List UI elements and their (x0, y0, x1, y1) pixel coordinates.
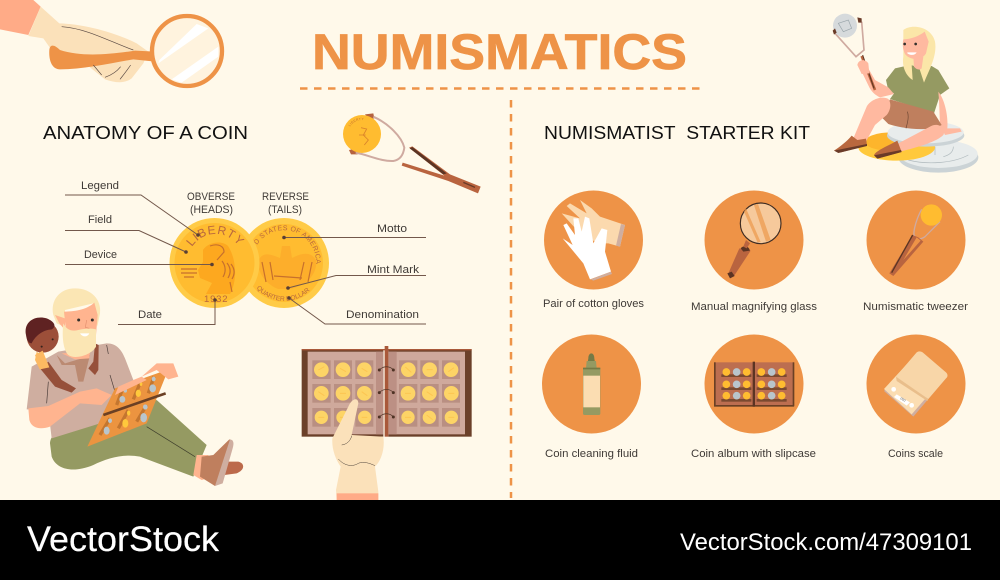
item: coin cleaning fluid (542, 334, 641, 460)
label: obverse (heads): OBVERSE (187, 191, 235, 203)
label: date: Date (138, 309, 162, 321)
coin: obverse: LIBERTY (186, 226, 244, 246)
item: pair of cotton gloves (543, 190, 645, 310)
illustration: hand opening coin album (302, 346, 472, 500)
item: coin album with slipcase: Coin album with slipcase (691, 448, 816, 460)
heading: anatomy of a coin: ANATOMY OF A COIN (43, 122, 248, 143)
label: obverse (heads) (187, 191, 235, 216)
coin: reverse (249, 218, 329, 308)
coin: reverse: D STATES OF AMERICA (254, 225, 321, 264)
item: pair of cotton gloves: Pair of cotton gloves (543, 298, 645, 310)
label: reverse (tails) (262, 191, 309, 216)
label: reverse (tails): REVERSE (262, 191, 309, 203)
label: field: Field (88, 214, 112, 226)
footer: watermark bar (0, 500, 1000, 580)
label: device: Device (84, 249, 117, 261)
item: numismatic tweezer (863, 190, 968, 313)
coin: reverse: QUARTER DOLLAR (257, 286, 310, 301)
coin: obverse (170, 218, 260, 308)
illustration: grandfather and child with coin board (26, 288, 243, 486)
item: coin cleaning fluid: Coin cleaning fluid (545, 448, 638, 460)
icon: tweezers holding coin: LIBERTY (348, 118, 364, 126)
heading: numismatist starter kit: NUMISMATIST STARTER KIT (544, 122, 810, 143)
footer: watermark bar: VectorStock (27, 520, 220, 559)
coin: obverse: 1932 (204, 294, 228, 305)
label: obverse (heads): (HEADS) (190, 204, 233, 216)
label: motto: Motto (377, 223, 407, 235)
item: numismatic tweezer: Numismatic tweezer (863, 301, 968, 313)
label: denomination: Denomination (346, 309, 419, 321)
item: coins scale: Coins scale (888, 448, 943, 460)
diagram: anatomy of a coin (65, 180, 426, 325)
label: mint mark: Mint Mark (367, 264, 420, 276)
footer: watermark bar: VectorStock.com/47309101 (680, 529, 972, 556)
illustration: girl sitting on coins with tweezers (833, 14, 978, 173)
panel: starter kit row 2 (542, 334, 966, 460)
callout dots (184, 233, 291, 302)
item: coin album with slipcase (691, 334, 816, 460)
item: coins scale (866, 334, 966, 460)
label: reverse (tails): (TAILS) (268, 204, 302, 216)
callout lines (65, 195, 426, 324)
label: legend: Legend (81, 180, 119, 192)
item: coins scale: 000 (899, 396, 906, 403)
item: manual magnifying glass (691, 190, 818, 313)
item: manual magnifying glass: Manual magnifying glass (691, 301, 818, 313)
title: NUMISMATICS (312, 24, 687, 80)
icon: tweezers holding coin (343, 113, 481, 194)
panel: starter kit row 1 (543, 190, 968, 313)
icon: hand holding magnifying glass (0, 0, 222, 86)
